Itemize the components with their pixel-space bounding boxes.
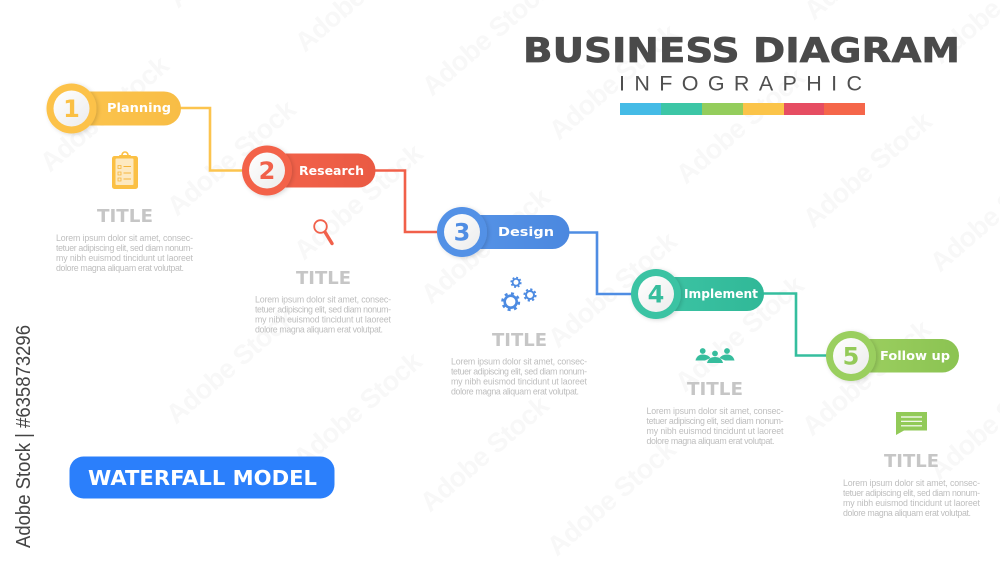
text block 2: dolore magna aliquam erat volutpat. <box>255 324 383 334</box>
text block 2 <box>255 268 392 334</box>
watermark pattern: Adobe Stock <box>34 49 175 178</box>
text block 3: my nibh euismod tincidunt ut laoreet <box>451 376 588 386</box>
watermark pattern: Adobe Stock <box>796 313 937 442</box>
text block 5: TITLE <box>884 451 939 472</box>
text block 1: dolore magna aliquam erat volutpat. <box>56 263 184 273</box>
watermark pattern: Adobe Stock <box>288 137 429 266</box>
text block 3: tetuer adipiscing elit, sed diam nonum- <box>451 366 587 376</box>
text block 4: tetuer adipiscing elit, sed diam nonum- <box>646 416 784 426</box>
text block 2: my nibh euismod tincidunt ut laoreet <box>255 314 392 324</box>
watermark pattern: Adobe Stock <box>543 17 684 146</box>
subtitle: INFOGRAPHIC <box>619 72 862 96</box>
colour bar <box>620 103 865 115</box>
text block 5: Lorem ipsum dolor sit amet, consec- <box>843 478 980 488</box>
text block 4: my nibh euismod tincidunt ut laoreet <box>646 426 784 436</box>
icon: people <box>696 348 734 363</box>
watermark pattern: Adobe Stock <box>669 269 810 398</box>
watermark pattern: Adobe Stock <box>670 61 811 190</box>
icon: magnifier <box>314 220 332 244</box>
text block 3: Lorem ipsum dolor sit amet, consec- <box>451 356 587 366</box>
watermark pattern: Adobe Stock <box>287 345 428 474</box>
step 2: Research: 2 <box>259 157 275 185</box>
text block 1: my nibh euismod tincidunt ut laoreet <box>56 253 194 263</box>
text block 1: TITLE <box>97 206 153 227</box>
step 1: Planning: Planning <box>107 101 171 115</box>
text block 5: tetuer adipiscing elit, sed diam nonum- <box>843 488 980 498</box>
text block 4: dolore magna aliquam erat volutpat. <box>646 436 774 446</box>
text block 5: dolore magna aliquam erat volutpat. <box>843 508 971 518</box>
badge: waterfall model: WATERFALL MODEL <box>88 466 317 490</box>
text block 4: TITLE <box>687 379 743 400</box>
step 3: Design: 3 <box>454 218 470 246</box>
step 4: Implement: Implement <box>684 287 758 301</box>
step 5: Follow up: 5 <box>843 342 859 370</box>
step 5: Follow up: Follow up <box>880 349 950 363</box>
watermark pattern: Adobe Stock <box>541 433 682 562</box>
watermark pattern: Adobe Stock <box>542 225 683 354</box>
text block 3: dolore magna aliquam erat volutpat. <box>451 386 579 396</box>
connector: step 4 to 5 <box>763 294 828 356</box>
step 2: Research <box>242 146 376 196</box>
text block 5 <box>843 451 981 518</box>
step 2: Research: Research <box>299 164 364 178</box>
watermark pattern: Adobe Stock <box>161 93 302 222</box>
step 4: Implement <box>631 269 764 319</box>
watermark pattern: Adobe Stock <box>797 105 938 234</box>
text block 3 <box>451 330 588 396</box>
badge: waterfall model <box>70 456 334 498</box>
icon: chat bubble <box>896 412 927 435</box>
connector: step 2 to 3 <box>374 170 439 232</box>
icon: clipboard <box>112 152 138 189</box>
watermark pattern: Adobe Stock <box>415 181 556 310</box>
watermark pattern: Adobe Stock <box>160 301 301 430</box>
stock id label: Adobe Stock | #635873296 <box>13 325 35 548</box>
text block 2: TITLE <box>296 268 351 289</box>
text block 1: tetuer adipiscing elit, sed diam nonum- <box>56 243 193 253</box>
text block 4 <box>646 379 784 446</box>
text block 1 <box>56 206 194 273</box>
text block 4: Lorem ipsum dolor sit amet, consec- <box>646 406 784 416</box>
step 5: Follow up <box>826 331 959 381</box>
text block 2: tetuer adipiscing elit, sed diam nonum- <box>255 304 391 314</box>
text block 3: TITLE <box>492 330 547 351</box>
text block 1: Lorem ipsum dolor sit amet, consec- <box>56 233 193 243</box>
step 3: Design <box>437 207 570 257</box>
connector: step 3 to 4 <box>568 232 633 294</box>
icon: gears <box>502 278 536 310</box>
text block 2: Lorem ipsum dolor sit amet, consec- <box>255 294 391 304</box>
step 1: Planning <box>46 84 181 134</box>
watermark pattern: Adobe Stock <box>414 389 555 518</box>
step 3: Design: Design <box>498 225 554 239</box>
connector: step 1 to 2 <box>180 108 244 170</box>
step 4: Implement: 4 <box>648 280 664 308</box>
text block 5: my nibh euismod tincidunt ut laoreet <box>843 498 981 508</box>
step 1: Planning: 1 <box>63 95 80 123</box>
title: BUSINESS DIAGRAM <box>523 31 960 71</box>
